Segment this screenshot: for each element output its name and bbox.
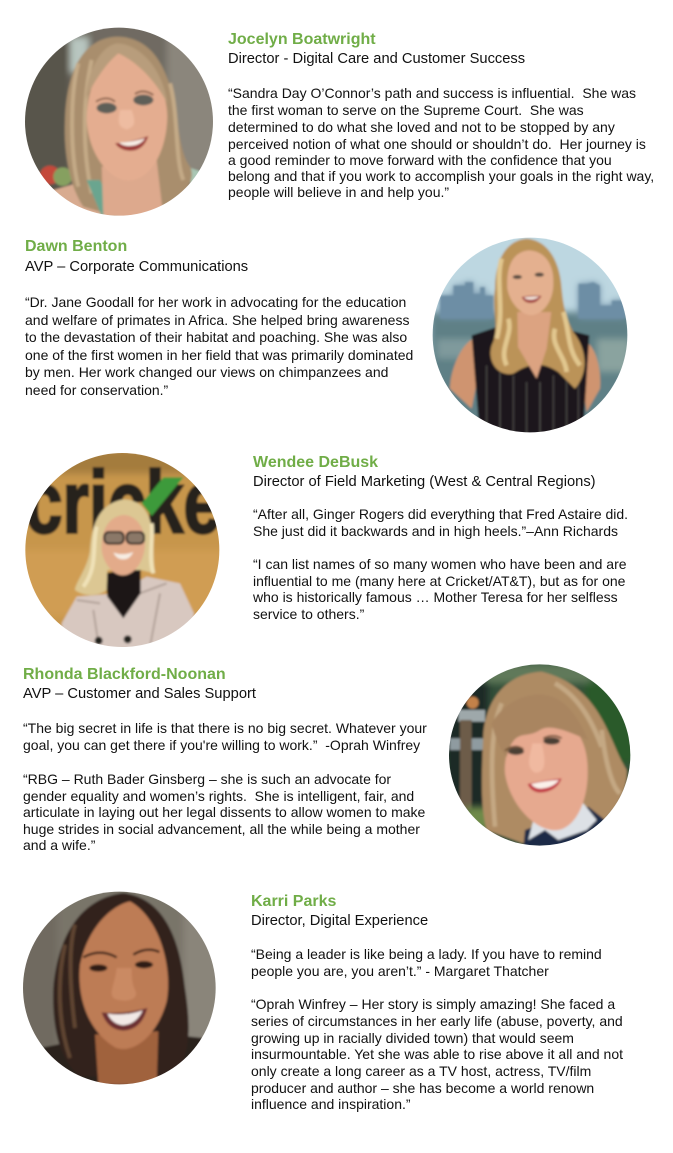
name and quote: Karri Parks: growing up in racially divided town) that would seem <box>251 1030 574 1046</box>
name and quote: Jocelyn Boatwright: perceived notion of what one should or shouldn’t do. Her journey is <box>228 136 646 152</box>
name and quote: Jocelyn Boatwright: the first woman to serve on the Supreme Court. She was <box>228 102 584 118</box>
name and quote: Jocelyn Boatwright: “Sandra Day O’Connor’s path and success is influential. She was <box>228 85 636 101</box>
name and quote: Jocelyn Boatwright: determined to do what she loved and not to be stopped by any <box>228 119 615 135</box>
name and quote: Jocelyn Boatwright: Jocelyn Boatwright <box>228 31 376 48</box>
name and quote: Wendee DeBusk: “After all, Ginger Rogers did everything that Fred Astaire did. <box>253 506 628 522</box>
name and quote: Dawn Benton: Dawn Benton <box>25 238 127 255</box>
name and quote: Jocelyn Boatwright <box>228 31 654 200</box>
name and quote: Wendee DeBusk: Director of Field Marketing (West & Central Regions) <box>253 474 596 490</box>
name and quote: Dawn Benton <box>25 238 413 398</box>
name and quote: Karri Parks: only create a long career as a TV host, actress, TV/film <box>251 1063 591 1079</box>
portrait: Dawn Benton <box>432 238 628 432</box>
name and quote: Wendee DeBusk <box>252 454 628 622</box>
name and quote: Wendee DeBusk: Wendee DeBusk <box>253 454 378 471</box>
name and quote: Karri Parks: insurmountable. Yet she was able to rise above it all and not <box>251 1046 623 1062</box>
name and quote: Jocelyn Boatwright: belong and that if you work to accomplish your goals in the right way, <box>228 168 654 184</box>
name and quote: Rhonda Blackford-Noonan: articulate in laying out her legal dissents to allow women to make <box>23 804 426 820</box>
name and quote: Wendee DeBusk: influential to me (many here at Cricket/AT&T), but as for one <box>253 573 626 589</box>
name and quote: Rhonda Blackford-Noonan: AVP – Customer and Sales Support <box>23 686 256 702</box>
portrait: Rhonda Blackford-Noonan <box>445 660 635 850</box>
portrait: Jocelyn Boatwright <box>25 28 213 216</box>
name and quote: Dawn Benton: need for conservation.” <box>25 382 169 398</box>
name and quote: Rhonda Blackford-Noonan: “RBG – Ruth Bader Ginsberg – she is such an advocate for <box>23 771 391 787</box>
name and quote: Dawn Benton: one of the first women in her field that was primarily dominated <box>25 347 413 363</box>
portrait: Wendee DeBusk <box>25 453 220 647</box>
name and quote: Karri Parks <box>251 893 623 1112</box>
name and quote: Karri Parks: “Being a leader is like being a lady. If you have to remind <box>251 946 602 962</box>
name and quote: Dawn Benton: “Dr. Jane Goodall for her work in advocating for the education <box>25 294 406 310</box>
name and quote: Dawn Benton: by men. Her work changed our views on chimpanzees and <box>25 364 388 380</box>
name and quote: Jocelyn Boatwright: a good reminder to move forward with the confidence that you <box>228 152 612 168</box>
name and quote: Karri Parks: series of circumstances in her early life (abuse, poverty, and <box>251 1013 623 1029</box>
name and quote: Rhonda Blackford-Noonan: goal, you can get there if you're willing to work.” -Oprah Winfrey <box>23 737 420 753</box>
name and quote: Rhonda Blackford-Noonan: “The big secret in life is that there is no big secret. Whatever your <box>23 720 427 736</box>
name and quote: Dawn Benton: to the devastation of their habitat and poaching. She was also <box>25 329 407 345</box>
name and quote: Karri Parks: producer and author – she has become a world renown <box>251 1080 594 1096</box>
name and quote: Rhonda Blackford-Noonan: gender equality and women’s rights. She is intelligent, fair, and <box>23 788 414 804</box>
name and quote: Rhonda Blackford-Noonan: and a wife.” <box>23 837 96 853</box>
name and quote: Karri Parks: “Oprah Winfrey – Her story is simply amazing! She faced a <box>251 996 615 1012</box>
portrait: Karri Parks <box>20 888 223 1088</box>
name and quote: Wendee DeBusk: “I can list names of so many women who have been and are <box>253 556 627 572</box>
name and quote: Dawn Benton: AVP – Corporate Communications <box>25 259 248 275</box>
name and quote: Wendee DeBusk: She just did it backwards and in high heels.”–Ann Richards <box>253 523 618 539</box>
name and quote: Wendee DeBusk: service to others.” <box>253 606 365 622</box>
name and quote: Rhonda Blackford-Noonan: Rhonda Blackford-Noonan <box>23 666 226 683</box>
name and quote: Karri Parks: influence and inspiration.” <box>251 1096 411 1112</box>
name and quote: Rhonda Blackford-Noonan <box>23 666 427 853</box>
name and quote: Karri Parks: people you are, you aren’t.” - Margaret Thatcher <box>251 963 549 979</box>
name and quote: Rhonda Blackford-Noonan: huge strides in social advancement, all the while being a mother <box>23 821 420 837</box>
wall sign lettering: cricke <box>25 453 221 552</box>
name and quote: Karri Parks: Karri Parks <box>251 893 336 910</box>
name and quote: Dawn Benton: and welfare of primates in Africa. She helped bring awareness <box>25 312 409 328</box>
name and quote: Wendee DeBusk: who is historically famous … Mother Teresa for her selfless <box>252 589 618 605</box>
name and quote: Karri Parks: Director, Digital Experience <box>251 913 428 929</box>
name and quote: Jocelyn Boatwright: people will believe in and help you.” <box>228 184 449 200</box>
name and quote: Jocelyn Boatwright: Director - Digital Care and Customer Success <box>228 51 525 67</box>
